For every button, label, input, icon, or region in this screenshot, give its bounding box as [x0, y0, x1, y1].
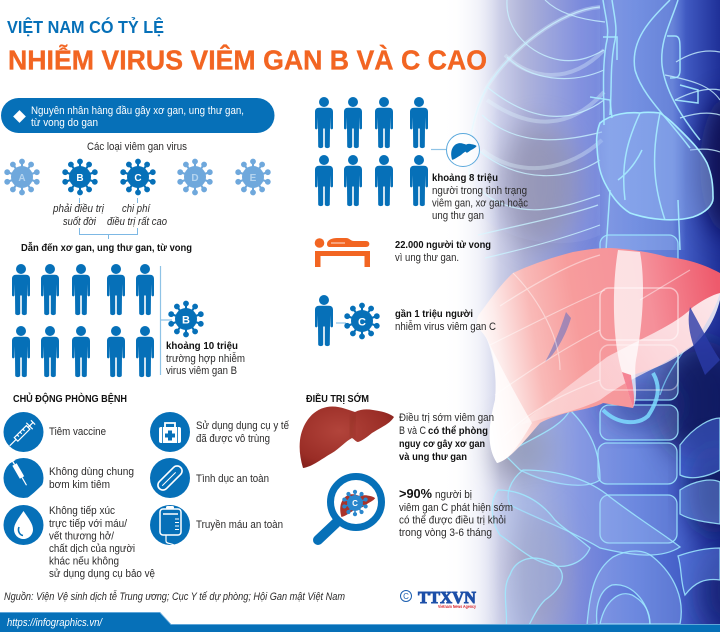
- virus C: [120, 159, 156, 195]
- stat: 90 percent: có thể được điều trị khỏi: [399, 514, 506, 526]
- text: safe sex: Tình dục an toàn: [196, 473, 269, 485]
- virus A: A: [18, 173, 26, 184]
- stat: 22,000 deaths: [395, 240, 491, 264]
- text: early treatment: [399, 412, 494, 463]
- stat: 22,000 deaths: vì ung thư gan.: [395, 252, 459, 264]
- virus C: C: [134, 173, 142, 184]
- virus D: D: [191, 173, 199, 184]
- logo: TTXVN: C: [403, 592, 409, 601]
- text: sterile tools: [196, 420, 289, 445]
- callout: leading cause: Nguyên nhân hàng đầu gây xơ gan, ung thư gan,: [31, 105, 244, 117]
- stat: hepatitis C: gần 1 triệu người: [395, 308, 473, 320]
- text: sterile tools: Sử dụng dụng cụ y tế: [196, 420, 289, 432]
- stat: hepatitis B cases: trường hợp nhiễm: [166, 352, 245, 365]
- notes for B and C with bracket: phải điều trị: [52, 203, 105, 215]
- callout: leading cause: [1, 98, 274, 133]
- icon: blood drop: [4, 505, 44, 545]
- footer bar: [0, 612, 720, 632]
- virus types row: [4, 159, 271, 195]
- central vessels and heart: [597, 112, 713, 220]
- people group: 8 million: [315, 97, 428, 206]
- icon: syringe: [4, 412, 44, 452]
- text: early treatment: và ung thư gan: [399, 452, 467, 463]
- stat: 8 million: người trong tình trạng: [432, 185, 527, 197]
- icon: magnifier with liver and virus: C: [352, 499, 358, 508]
- source: Nguồn: Viện Vệ sinh dịch tễ Trung ương; Cục Y tế dự phòng; Hội Gan mật Việt Nam: [4, 590, 345, 603]
- icon: person with virus C: [315, 295, 380, 346]
- stat: 22,000 deaths: 22.000 người tử vong: [395, 240, 491, 251]
- icon: patient on bed: [315, 238, 370, 267]
- virus E: E: [250, 173, 257, 184]
- logo: TTXVN: Vietnam News Agency: [438, 604, 476, 609]
- stat: 90 percent: >90%: [399, 486, 432, 501]
- stat: hepatitis C: [395, 308, 496, 333]
- notes for B and C with bracket: [52, 198, 167, 239]
- spine column: [596, 0, 686, 250]
- text: blood contact: vết thương hở/: [49, 530, 114, 542]
- stat: 90 percent: [399, 486, 513, 539]
- stat: 90 percent: viêm gan C phát hiện sớm: [399, 502, 513, 514]
- notes for B and C with bracket: chi phí: [122, 203, 151, 215]
- logo: TTXVN: TTXVN: [418, 588, 477, 607]
- heading: early treatment: ĐIỀU TRỊ SỚM: [306, 392, 369, 405]
- text: early treatment: nguy cơ gây xơ gan: [399, 439, 485, 450]
- text: blood contact: chất dịch của người: [49, 543, 135, 555]
- heading: leads to: Dẫn đến xơ gan, ung thư gan, từ vong: [21, 241, 192, 254]
- text: safe transfusion: Truyền máu an toàn: [196, 519, 283, 531]
- icon: blood bag: [150, 505, 190, 545]
- logo: TTXVN: [400, 588, 477, 609]
- virus B: [62, 159, 98, 195]
- stat: hepatitis B cases: B: [182, 314, 190, 326]
- liver illustration: [300, 407, 394, 468]
- stat: 90 percent: người bị: [435, 489, 472, 501]
- icon: liver in circle: [431, 134, 480, 166]
- ribs: [469, 7, 604, 180]
- text: early treatment: B và C: [399, 425, 426, 437]
- stat: hepatitis B cases: khoảng 10 triệu: [166, 341, 238, 352]
- heading: prevention: CHỦ ĐỘNG PHÒNG BỆNH: [13, 392, 127, 405]
- text: early treatment: có thể phòng: [428, 425, 488, 437]
- text: needle: Không dùng chung: [49, 466, 134, 478]
- stat: hepatitis C: nhiễm virus viêm gan C: [395, 320, 496, 333]
- virus A: [4, 159, 40, 195]
- icon: no shared needle: [4, 458, 45, 501]
- stat: 90 percent: trong vòng 3-6 tháng: [399, 527, 492, 539]
- text: needle: bơm kim tiêm: [49, 479, 110, 491]
- text: blood contact: Không tiếp xúc: [49, 505, 116, 517]
- icon: person with virus C: C: [358, 316, 366, 328]
- text: sterile tools: đã được vô trùng: [196, 433, 270, 445]
- people group: 10 million: [12, 264, 154, 377]
- footer bar: https://infographics.vn/: [7, 617, 103, 629]
- icon: condom: [150, 458, 190, 498]
- heading: virus types: Các loại viêm gan virus: [87, 141, 187, 153]
- text: blood contact: [49, 505, 155, 580]
- notes for B and C with bracket: điều trị rất cao: [107, 216, 167, 228]
- virus B: B: [76, 173, 84, 184]
- text: vaccine: Tiêm vaccine: [49, 426, 106, 438]
- stat: hepatitis B cases: [160, 266, 245, 377]
- virus D: [177, 159, 213, 195]
- title: VIỆT NAM CÓ TỶ LỆ: [7, 16, 164, 37]
- title: [7, 16, 487, 76]
- icon: magnifier with liver and virus: [318, 476, 382, 540]
- stat: 8 million: [432, 173, 529, 222]
- text: needle: [49, 466, 134, 491]
- text: blood contact: sử dụng dụng cụ bảo vệ: [49, 568, 155, 580]
- stat: 8 million: khoảng 8 triệu: [432, 173, 498, 184]
- stat: 8 million: ung thư gan: [432, 210, 484, 222]
- lung: [473, 7, 600, 243]
- notes for B and C with bracket: suốt đời: [63, 216, 97, 228]
- icon: medical kit: [150, 412, 190, 452]
- abdominal organs: [492, 235, 720, 632]
- liver: [477, 248, 720, 463]
- stat: 8 million: viêm gan, xơ gan hoặc: [432, 198, 529, 210]
- text: blood contact: trực tiếp với máu/: [49, 518, 127, 530]
- callout: leading cause: từ vong do gan: [31, 117, 98, 129]
- text: blood contact: khác nếu không: [49, 556, 119, 568]
- stat: hepatitis B cases: virus viêm gan B: [166, 365, 237, 377]
- text: early treatment: Điều trị sớm viêm gan: [399, 412, 494, 424]
- title: NHIỄM VIRUS VIÊM GAN B VÀ C CAO: [8, 44, 487, 76]
- virus E: [235, 159, 271, 195]
